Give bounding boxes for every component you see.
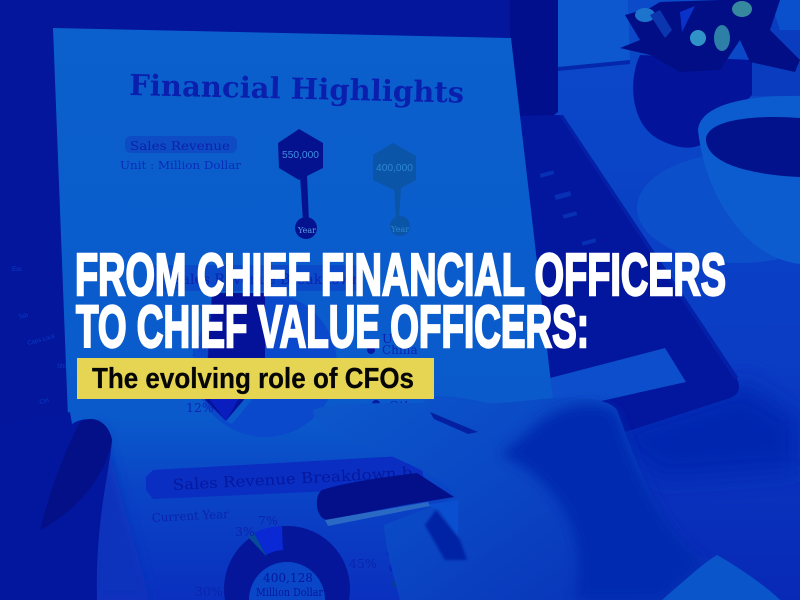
hexagon pin 550,000: Year <box>297 226 316 235</box>
top pie chart <box>193 293 337 437</box>
pie legend <box>367 331 426 413</box>
left hand holding paper <box>0 412 112 600</box>
paper content <box>120 68 465 600</box>
faint heading behind title <box>150 265 361 291</box>
donut chart: 400,128 <box>263 570 313 585</box>
donut percentages: 7% <box>258 513 278 528</box>
saucer <box>637 153 800 263</box>
plant in dark pot <box>620 0 800 148</box>
donut percentages: 45% <box>349 556 377 571</box>
sales revenue label: Sales Revenue <box>130 138 230 153</box>
hexagon pin 550,000 <box>278 129 323 239</box>
breakdown banner <box>146 455 425 499</box>
shirt cuff <box>662 555 780 600</box>
sales revenue label: Unit : Million Dollar <box>120 158 242 172</box>
keyboard key labels: Esc <box>12 267 22 273</box>
hexagon pin 550,000: 550,000 <box>282 150 319 161</box>
donut chart <box>224 526 350 600</box>
hexagon pin 400,000 <box>373 143 416 236</box>
paper content: 1% <box>190 345 209 359</box>
pie legend: China <box>382 343 418 357</box>
keyboard key labels <box>12 267 69 406</box>
pie legend: US <box>382 331 401 346</box>
donut percentages <box>195 513 377 599</box>
keyboard key labels: Shift <box>57 364 69 370</box>
keyboard key labels: Ctrl <box>39 398 50 406</box>
faint heading behind title: Sales Revenue Breakdown <box>172 272 361 288</box>
subtitle banner: The evolving role of CFOs <box>92 363 414 395</box>
right hand <box>313 396 782 600</box>
coffee cup <box>698 96 800 264</box>
pen <box>317 473 454 526</box>
paper <box>53 28 570 600</box>
donut legend dots <box>387 549 400 588</box>
hexagon pin 400,000: 400,000 <box>376 163 413 174</box>
background: laptop and keyboard <box>12 0 739 437</box>
pie legend: Other <box>389 398 426 413</box>
current year label: Current Year <box>151 507 229 525</box>
keyboard key labels: Caps Lock <box>27 334 57 347</box>
donut percentages: 30% <box>195 584 223 599</box>
sales revenue label <box>120 136 242 172</box>
hexagon pin 400,000: Year <box>390 225 409 234</box>
donut chart: Million Dollar <box>256 586 324 599</box>
pie percentage: 12% <box>186 400 214 415</box>
keyboard key labels: Tab <box>18 312 30 321</box>
title <box>75 242 726 360</box>
keys <box>540 170 596 246</box>
breakdown banner: Sales Revenue Breakdown b <box>172 463 413 494</box>
donut percentages: 3% <box>235 524 255 539</box>
paper heading: Financial Highlights <box>129 68 465 110</box>
